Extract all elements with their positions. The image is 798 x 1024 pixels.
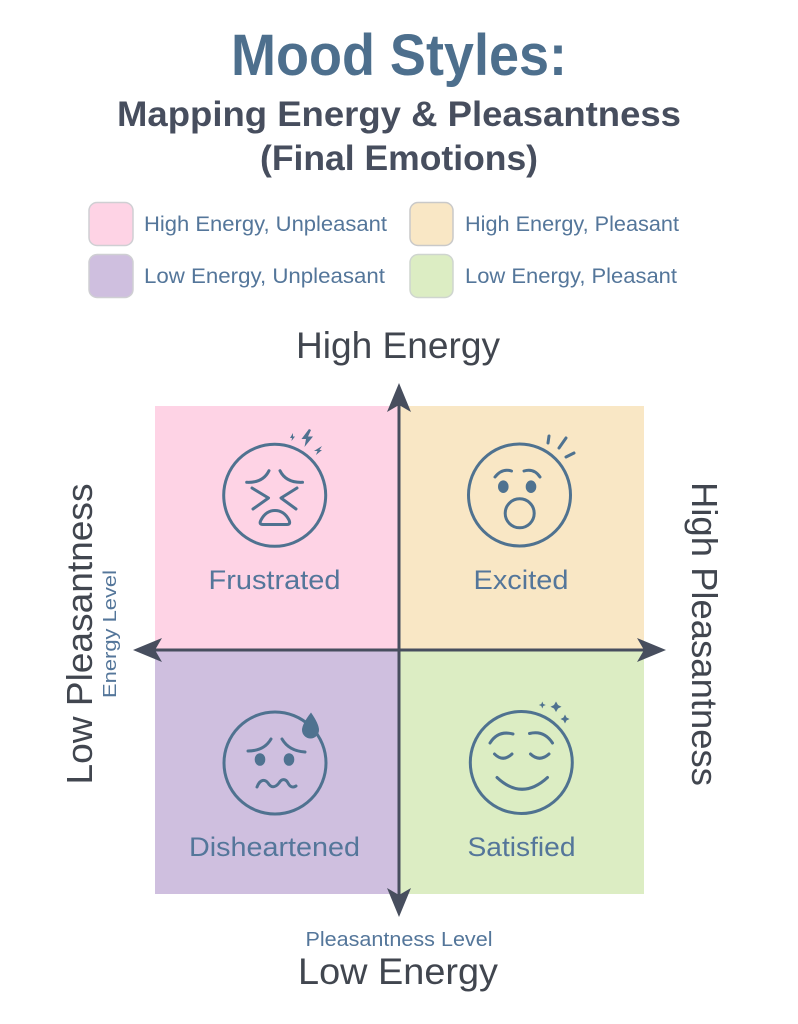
- subtitle: (Final Emotions): [260, 139, 538, 178]
- title: Mood Styles:: [231, 23, 567, 88]
- axis label: high energy: High Energy: [296, 325, 500, 366]
- panel: disheartened: [155, 650, 399, 894]
- legend item: low energy, unpleasant: [89, 254, 385, 298]
- axis label: high pleasantness: High Pleasantness: [684, 482, 725, 786]
- label: satisfied: Satisfied: [468, 832, 576, 862]
- label: excited: Excited: [474, 565, 568, 595]
- axis label: energy level: Energy Level: [100, 570, 120, 698]
- legend item: high energy, unpleasant: High Energy, Unpleasant: [144, 213, 387, 236]
- arrow: horizontal axis: [133, 638, 666, 662]
- label: disheartened: Disheartened: [189, 832, 360, 862]
- axis label: low pleasantness: Low Pleasantness: [59, 484, 100, 784]
- legend item: high energy, pleasant: [410, 202, 679, 246]
- subtitle: Mapping Energy & Pleasantness: [117, 95, 681, 134]
- legend item: low energy, unpleasant: Low Energy, Unpleasant: [144, 265, 385, 288]
- panel: frustrated: [155, 406, 399, 650]
- legend item: low energy, pleasant: [410, 254, 677, 298]
- axis label: low energy: Low Energy: [298, 951, 499, 992]
- panel: satisfied: [399, 650, 644, 894]
- icon: frustrated face: [224, 429, 326, 546]
- panel: excited: [399, 406, 644, 650]
- legend: [89, 202, 679, 298]
- arrow: vertical axis: [387, 383, 411, 917]
- legend item: low energy, pleasant: Low Energy, Pleasant: [465, 265, 677, 288]
- legend item: high energy, pleasant: High Energy, Pleasant: [465, 213, 679, 236]
- icon: satisfied face: [470, 702, 572, 814]
- label: frustrated: Frustrated: [208, 565, 340, 595]
- axis label: pleasantness level: Pleasantness Level: [306, 929, 492, 951]
- legend item: high energy, unpleasant: [89, 202, 387, 246]
- subtitle: [117, 95, 681, 178]
- icon: excited face: [468, 436, 574, 546]
- icon: disheartened face: [224, 712, 326, 814]
